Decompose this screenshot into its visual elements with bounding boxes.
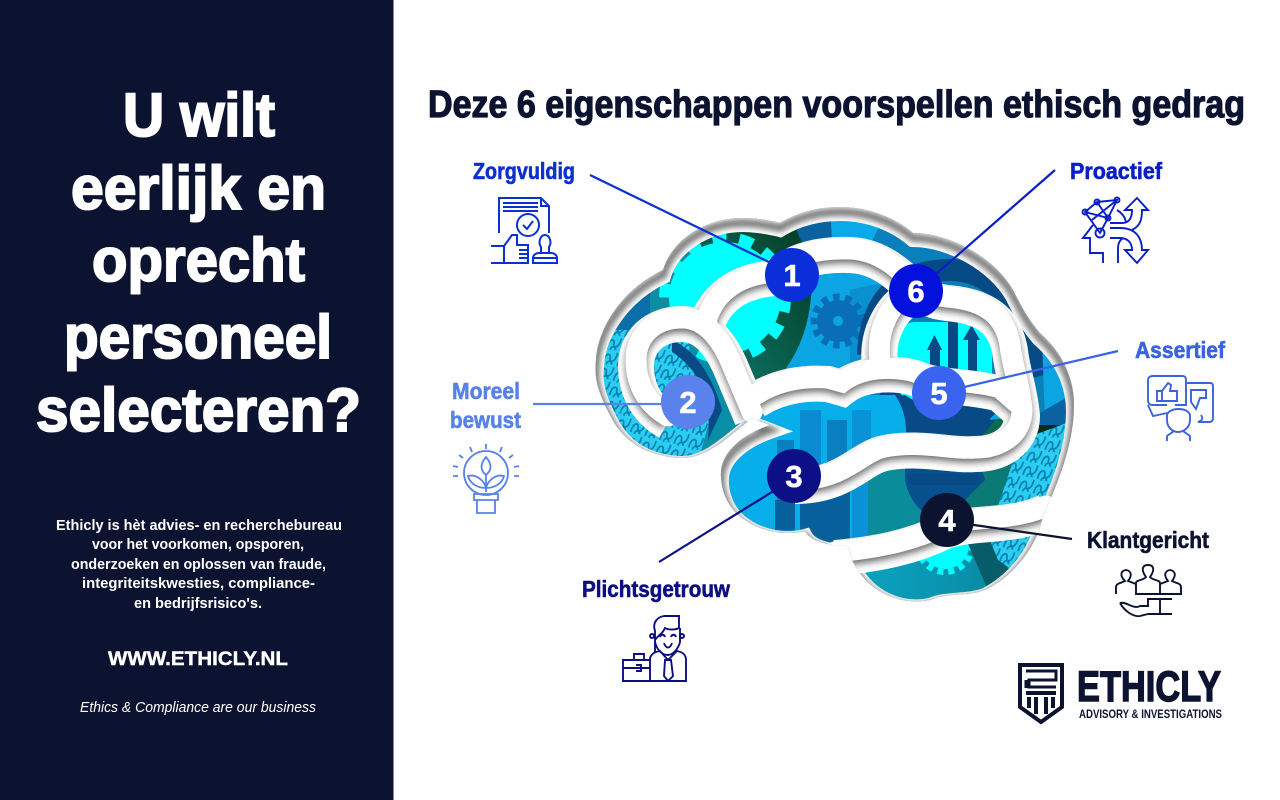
connector: Plichtsgetrouw	[659, 487, 780, 562]
icon: light bulb with plant	[453, 444, 519, 513]
icon: person with speech bubbles	[1148, 376, 1213, 441]
heading: sidebar question	[36, 81, 361, 444]
node 1	[765, 248, 819, 302]
brain artwork: coloured regions	[590, 200, 1080, 610]
heading: sidebar question: oprecht	[92, 226, 305, 294]
label: Zorgvuldig: Zorgvuldig	[473, 158, 575, 184]
connector: Klantgericht	[960, 523, 1072, 539]
left lobe rope pattern	[596, 330, 718, 458]
node 3: 3	[785, 459, 803, 494]
node 4	[920, 493, 974, 547]
icon: businessman with briefcase	[623, 616, 686, 681]
panel: left dark sidebar	[0, 0, 394, 800]
text block: company description: onderzoeken en oplossen van fraude,	[71, 557, 326, 573]
text block: company description: voor het voorkomen, opsporen,	[92, 537, 304, 553]
node 1: 1	[783, 258, 801, 293]
label: Moreel bewust: bewust	[450, 407, 521, 433]
node 4: 4	[938, 503, 956, 538]
logo subtitle: ADVISORY & INVESTIGATIONS	[1079, 709, 1222, 721]
label: Proactief: Proactief	[1070, 158, 1162, 184]
connector: Zorgvuldig	[590, 175, 775, 265]
text: tagline: Ethics & Compliance are our business	[80, 699, 316, 716]
heading: sidebar question: U wilt	[123, 81, 275, 149]
node 6: 6	[907, 274, 925, 309]
logo: Ethicly	[1020, 663, 1222, 722]
connector: Moreel bewust	[533, 403, 670, 405]
text block: company description: Ethicly is hèt advies- en recherchebureau	[56, 518, 342, 534]
heading: sidebar question: selecteren?	[36, 376, 361, 444]
node 6	[889, 264, 943, 318]
node 2: 2	[679, 385, 697, 420]
logo wordmark: ETHICLY	[1077, 663, 1221, 711]
node 2	[661, 375, 715, 429]
node 3	[767, 449, 821, 503]
node 5	[912, 366, 966, 420]
text block: company description: en bedrijfsrisico's.	[134, 596, 262, 612]
heading: sidebar question: eerlijk en	[71, 154, 326, 222]
icon: head with network and arrows	[1082, 198, 1148, 263]
connector: Proactief	[935, 170, 1055, 275]
heading: sidebar question: personeel	[64, 303, 332, 371]
text block: company description: integriteitskwesties, compliance-	[82, 576, 315, 592]
brain outer rim shading	[596, 212, 1074, 607]
white folds of the brain	[636, 249, 1046, 552]
label: Assertief: Assertief	[1135, 337, 1225, 363]
text block: company description	[56, 518, 342, 612]
icon: document with stamp and thumb	[491, 198, 557, 263]
chart: brain illustration	[533, 170, 1118, 610]
label: Klantgericht: Klantgericht	[1087, 527, 1209, 553]
label: Moreel bewust: Moreel	[452, 378, 520, 404]
label: Plichtsgetrouw: Plichtsgetrouw	[582, 576, 730, 602]
connector: Assertief	[960, 351, 1118, 388]
logo shield	[1020, 665, 1062, 722]
node 5: 5	[930, 376, 948, 411]
band shadows	[636, 253, 1046, 558]
text: website: WWW.ETHICLY.NL	[108, 649, 288, 670]
icon: customers on a hand	[1116, 565, 1181, 616]
label: Moreel bewust	[450, 378, 521, 433]
